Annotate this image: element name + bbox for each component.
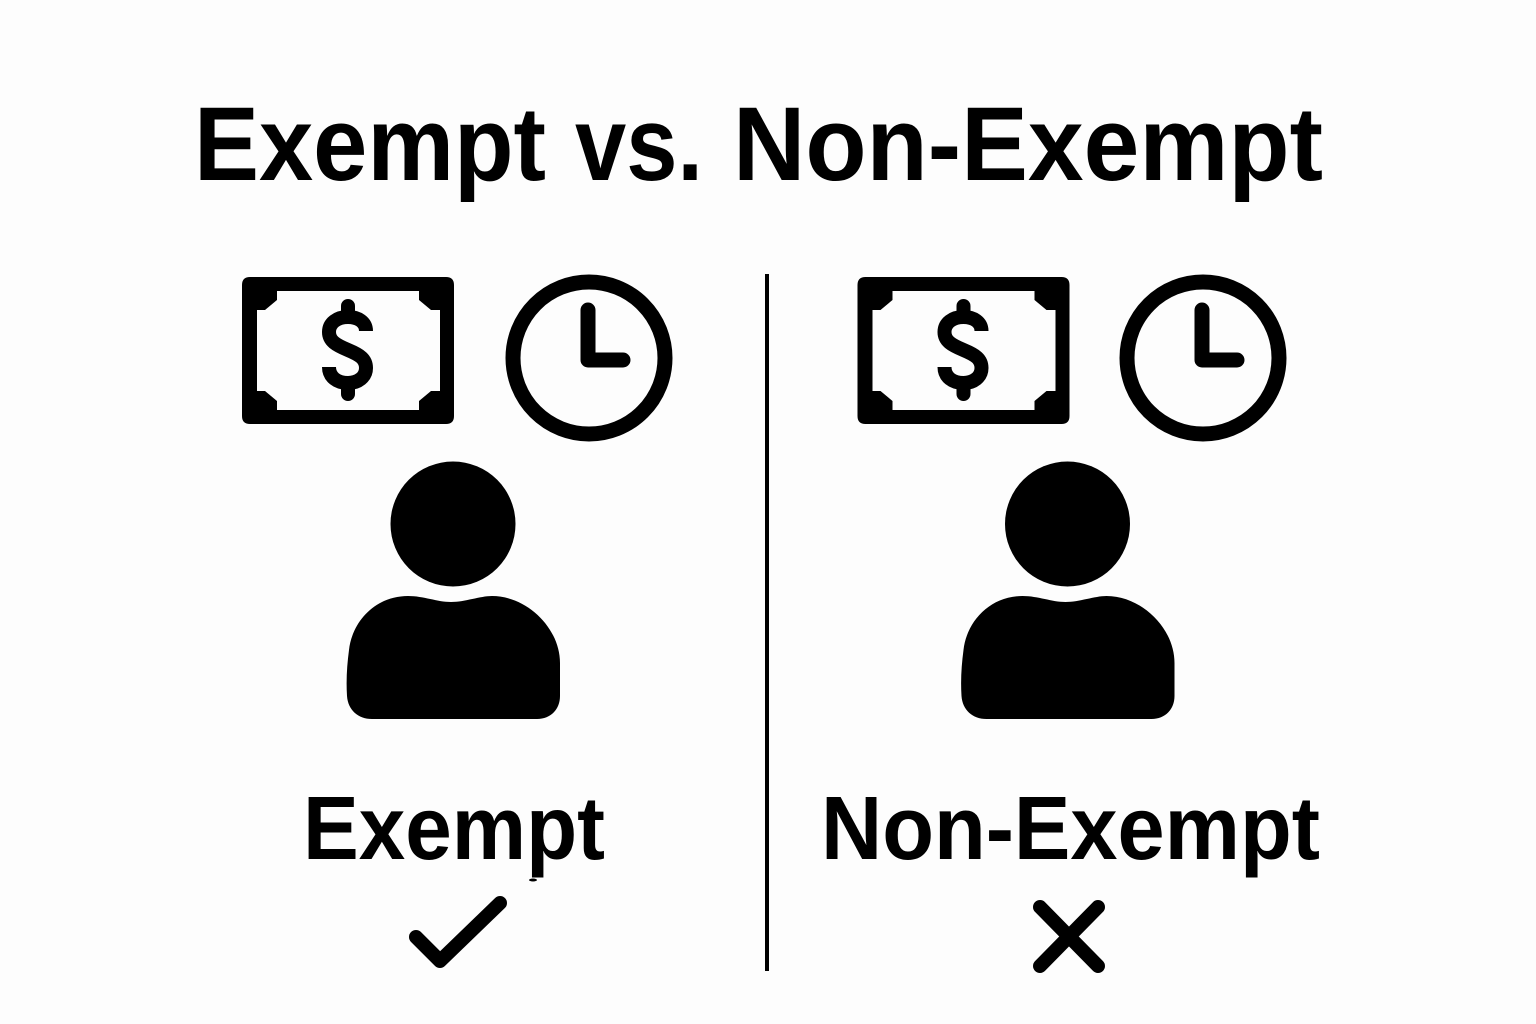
title	[194, 86, 1323, 203]
icon: dollar bill	[858, 277, 1070, 424]
title: vs.	[575, 86, 703, 203]
icon: clock	[1127, 282, 1279, 434]
title: Non-Exempt	[733, 86, 1323, 203]
center divider	[765, 274, 769, 971]
title: Exempt	[194, 86, 546, 203]
label: exempt: Exempt	[303, 779, 605, 879]
icon: cross mark	[1040, 907, 1098, 966]
icon: person	[347, 462, 560, 719]
icon: dollar bill	[242, 277, 454, 424]
label: non-exempt: Non-Exempt	[821, 779, 1320, 879]
panel: non-exempt	[821, 277, 1320, 966]
panel: exempt	[242, 277, 665, 961]
icon: clock	[513, 282, 665, 434]
icon: person	[961, 462, 1174, 719]
icon: check mark	[416, 903, 500, 961]
